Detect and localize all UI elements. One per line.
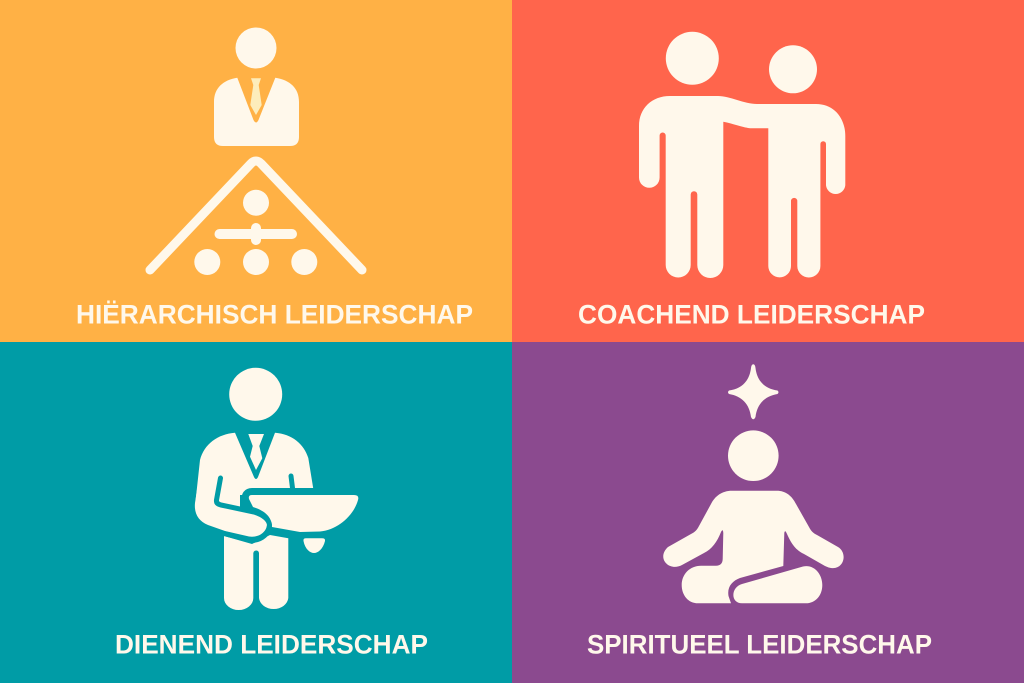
- heading: spiritueel: SPIRITUEEL LEIDERSCHAP: [587, 630, 932, 660]
- panel: dienend leiderschap: [0, 342, 512, 683]
- icon: meditating figure with star: [663, 364, 844, 603]
- heading: coachend: COACHEND LEIDERSCHAP: [578, 300, 925, 330]
- icon: leader above pyramid: [150, 28, 362, 275]
- icon: serving person with bowl: [195, 368, 358, 610]
- panel: hiërarchisch leiderschap: [0, 0, 512, 342]
- icon: two people, arm on shoulder: [639, 32, 845, 278]
- panel: coachend leiderschap: [512, 0, 1024, 342]
- heading: hiërarchisch: HIËRARCHISCH LEIDERSCHAP: [76, 300, 473, 330]
- panel: spiritueel leiderschap: [512, 342, 1024, 683]
- heading: dienend: DIENEND LEIDERSCHAP: [115, 630, 428, 660]
